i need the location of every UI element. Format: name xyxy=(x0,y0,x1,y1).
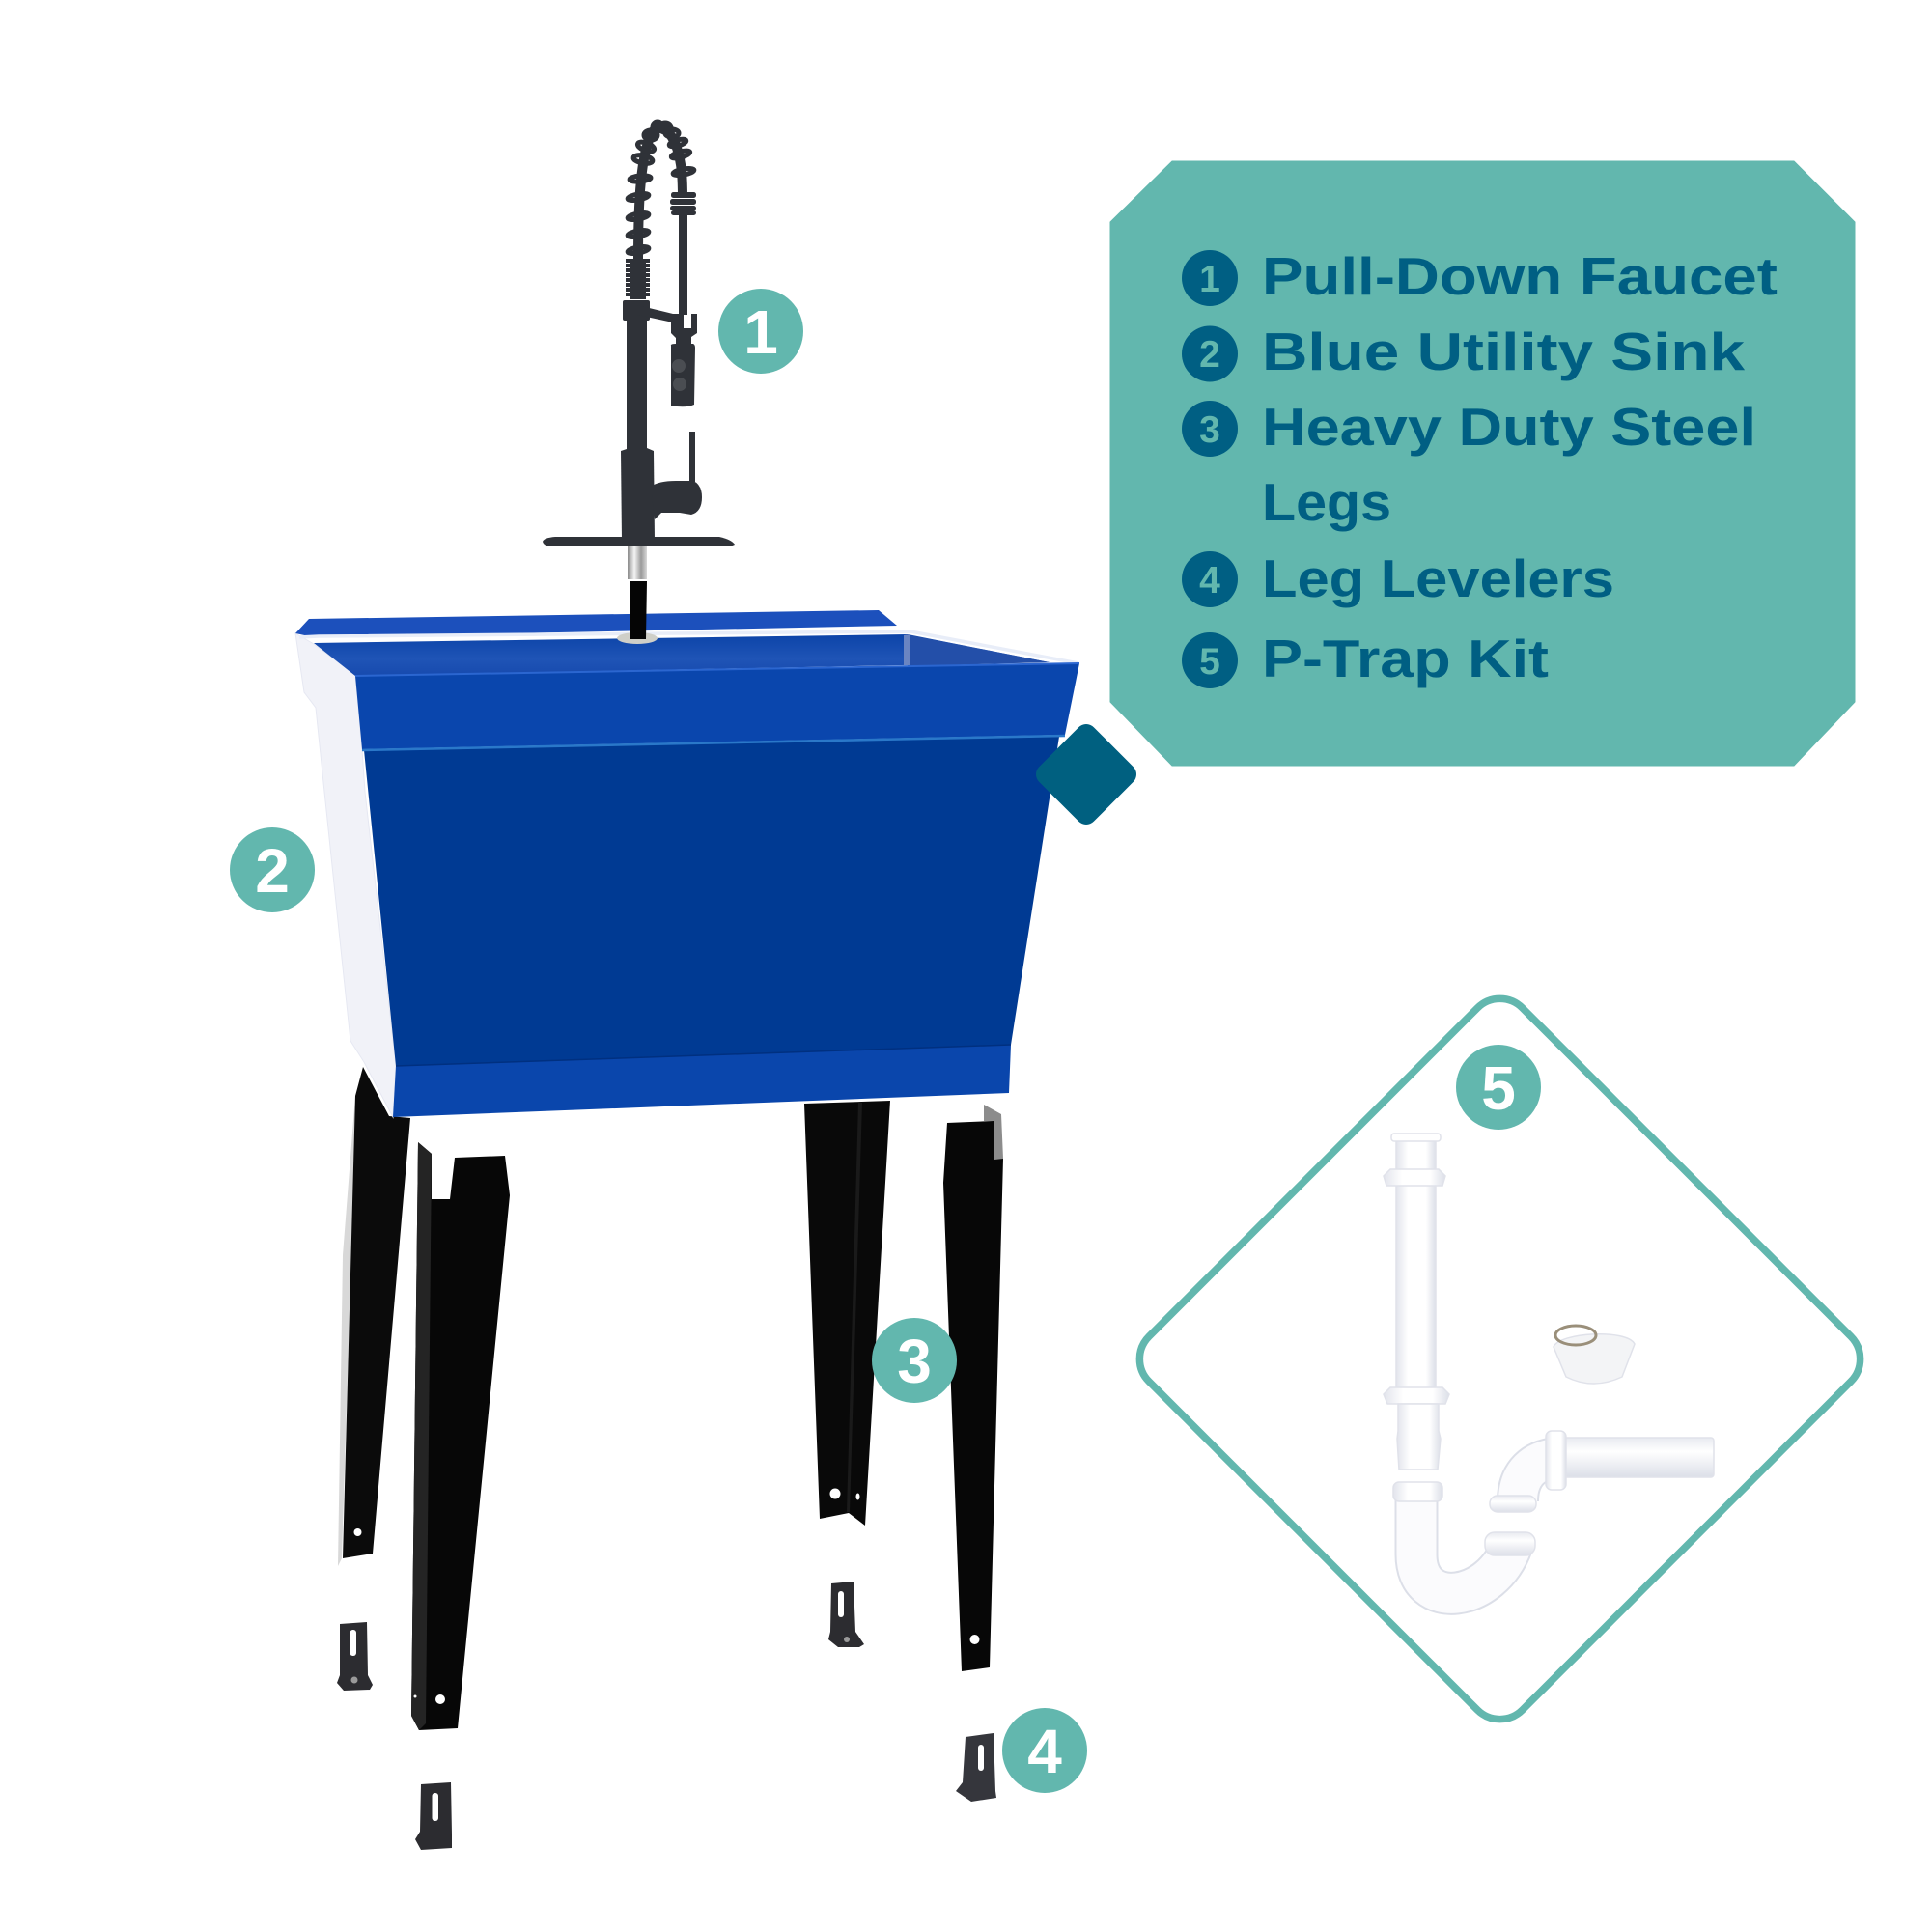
number badge 5: 5 xyxy=(1481,1053,1516,1123)
item 3 xyxy=(1182,397,1756,532)
leveler: rear left xyxy=(337,1622,373,1691)
leg: front left xyxy=(411,1142,510,1730)
faucet: ribbed coil base xyxy=(626,259,650,299)
faucet: body xyxy=(621,448,655,541)
sink: bottom ledge line xyxy=(396,1045,1011,1066)
number badge 2 xyxy=(230,827,315,912)
leg: back left xyxy=(338,1067,410,1566)
leg levelers xyxy=(337,1582,996,1850)
faucet: handle xyxy=(651,481,702,519)
faucet: hose xyxy=(679,214,687,315)
faucet: black shank xyxy=(630,581,647,639)
legend pointer diamond xyxy=(1031,719,1141,829)
part: elbow and tail xyxy=(1490,1431,1714,1512)
number badge 4 xyxy=(1002,1708,1087,1793)
sink xyxy=(295,610,1079,1117)
item 2: Blue Utility Sink xyxy=(1262,322,1745,381)
sink: white rim line xyxy=(299,631,1078,663)
faucet: holder xyxy=(671,314,697,344)
number badge 3: 3 xyxy=(897,1327,932,1396)
sink: main body xyxy=(364,737,1059,1066)
sink: front rim edge highlight xyxy=(355,663,1079,676)
number badge 1: 1 xyxy=(743,297,778,367)
number badge 3 xyxy=(872,1318,957,1403)
item 4: Leg Levelers xyxy=(1262,548,1614,608)
faucet xyxy=(543,122,735,644)
item 2: 2 xyxy=(1199,334,1220,376)
panel background xyxy=(1110,161,1855,766)
item 3: Heavy Duty Steel xyxy=(1262,397,1756,457)
part: rubber stopper xyxy=(1554,1326,1635,1384)
item 1: 1 xyxy=(1199,259,1220,300)
sink: basin right wall xyxy=(906,634,1050,666)
item 4: 4 xyxy=(1199,560,1220,602)
faucet: deck plate xyxy=(543,537,735,546)
faucet: nickel shaft xyxy=(628,546,647,579)
faucet: sprayer head xyxy=(671,344,695,406)
part: tailpiece tube xyxy=(1384,1134,1449,1470)
leveler: back right xyxy=(828,1582,864,1647)
sink: back rim xyxy=(295,610,897,637)
faucet: coil upper ribs xyxy=(670,192,696,215)
item 5: 5 xyxy=(1199,641,1220,683)
faucet: spring coil xyxy=(628,122,694,259)
item 5 xyxy=(1182,629,1549,688)
number badge 2: 2 xyxy=(255,836,290,906)
sink: basin interior xyxy=(314,634,1050,676)
sink: basin corner highlight xyxy=(904,634,910,665)
faucet: spout column xyxy=(627,303,647,450)
number badge 1 xyxy=(718,289,803,374)
faucet: drain hole xyxy=(617,632,658,644)
legs xyxy=(338,1067,1003,1730)
leveler: front right xyxy=(956,1733,996,1802)
faucet: lever xyxy=(689,432,695,482)
part: j-bend xyxy=(1393,1482,1535,1593)
number badge 4: 4 xyxy=(1027,1717,1062,1786)
faucet: collar xyxy=(623,300,650,321)
item 1: Pull-Down Faucet xyxy=(1262,246,1778,306)
p-trap kit parts xyxy=(1384,1134,1714,1593)
leveler: front left xyxy=(415,1782,452,1850)
item 5: P-Trap Kit xyxy=(1262,629,1549,688)
item 3: 3 xyxy=(1199,409,1220,451)
faucet: arm xyxy=(637,305,673,322)
p-trap kit diamond frame xyxy=(1127,986,1873,1732)
item 3: Legs xyxy=(1262,472,1391,532)
legend panel xyxy=(1110,161,1855,766)
sink: body ledge highlight xyxy=(362,736,1065,750)
sink: bottom band xyxy=(393,1045,1011,1117)
leg: back right xyxy=(804,1101,890,1526)
leg: right front xyxy=(943,1105,1003,1671)
number badge 5 xyxy=(1456,1045,1541,1130)
sink: front rim band xyxy=(355,663,1079,749)
sink: white left side xyxy=(295,633,396,1117)
